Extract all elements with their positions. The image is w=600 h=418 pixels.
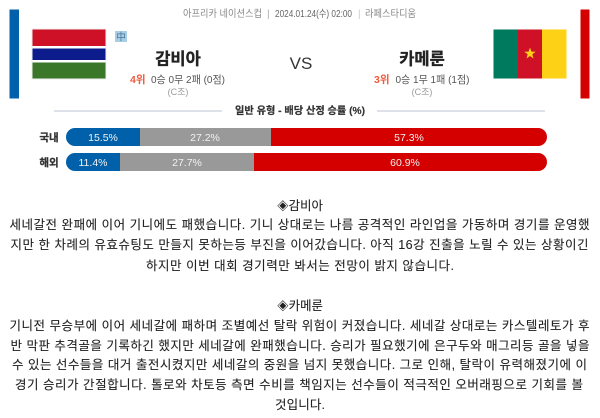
text block: Gambia analysis: 지만 한 차례의 유효슈팅도 만들지 못하는등 부진을 이어갔습니다. 아직 16강 진출을 노릴 수 있는 상황이긴 <box>10 238 588 252</box>
text block: Cameroon analysis: 것입니다. <box>275 398 325 412</box>
text block: Cameroon analysis: 수 있는 선수들을 대거 출전시켰지만 세네갈의 중원을 넘지 못했습니다. 그로 인해, 탈락이 유력해졌기에 이 <box>12 357 587 372</box>
text block: Cameroon analysis: ◈카메룬 <box>277 299 323 313</box>
home team record: 4위 <box>130 73 146 86</box>
match info header: 2024.01.24(수) 02:00 <box>275 8 352 20</box>
away team record: 0승 1무 1패 (1점) <box>396 74 470 86</box>
icon: neutral venue badge: 中 <box>116 30 126 44</box>
text block: Cameroon analysis <box>10 299 590 412</box>
text block: Cameroon analysis: 기니전 무승부에 이어 세네갈에 패하며 조별예선 탈락 위험이 커졌습니다. 세네갈 상대로는 카스텔레토가 후 <box>10 319 590 333</box>
text block: Gambia analysis <box>10 199 590 273</box>
bar chart: domestic odds: 57.3% <box>394 132 424 144</box>
text block: Gambia analysis: 세네갈전 완패에 이어 기니에도 패했습니다. 기니 상대로는 나름 공격적인 라인업을 가동하며 경기를 운영했 <box>10 217 590 232</box>
flag: Cameroon <box>494 30 566 78</box>
home team record: 0승 0무 2패 (0점) <box>151 74 225 86</box>
bar chart: domestic odds: 국내 <box>39 131 59 144</box>
away team colour bar <box>580 10 590 98</box>
away team record: 3위 <box>374 73 390 86</box>
home team group: (C조) <box>168 87 188 97</box>
away team group: (C조) <box>412 87 432 97</box>
bar chart: overseas odds: 60.9% <box>390 157 420 169</box>
bar chart: domestic odds: 27.2% <box>190 132 220 144</box>
bar chart: overseas odds <box>39 153 547 171</box>
text block: Gambia analysis: 하지만 이번 대회 경기력만 봐서는 전망이 밝지 않습니다. <box>146 259 454 273</box>
bar chart: domestic odds: 15.5% <box>88 132 118 144</box>
text block: Cameroon analysis: 반 막판 추격골을 기록하긴 했지만 세네갈에 완패했습니다. 승리가 필요했기에 은구두와 매그리등 골을 넣을 <box>10 338 590 353</box>
home team record <box>130 73 225 86</box>
bar chart: overseas odds: 27.7% <box>172 157 202 169</box>
match info header <box>183 7 416 20</box>
text block: Cameroon analysis: 경기 승리가 간절합니다. 톨로와 차토등 측면 수비를 책임지는 선수들이 적극적인 오버래핑으로 기회를 볼 <box>15 377 583 392</box>
away team record <box>374 73 470 86</box>
bar chart: domestic odds <box>39 128 547 146</box>
match info header: 라페스타디움 <box>365 8 416 20</box>
home team colour bar <box>10 10 19 98</box>
home team name: 감비아 <box>155 50 201 68</box>
bar chart: overseas odds: 11.4% <box>78 157 108 169</box>
chart title: 일반 유형 - 배당 산정 승률 (%) <box>235 104 365 117</box>
VS label: VS <box>290 54 312 73</box>
match info header: | <box>358 9 361 20</box>
away team name: 카메룬 <box>399 50 445 68</box>
flag: Gambia <box>32 29 106 79</box>
text block: Gambia analysis: ◈감비아 <box>277 199 323 213</box>
bar chart: overseas odds: 해외 <box>39 156 59 169</box>
match info header: | <box>267 9 270 20</box>
match info header: 아프리카 네이션스컵 <box>183 7 262 20</box>
